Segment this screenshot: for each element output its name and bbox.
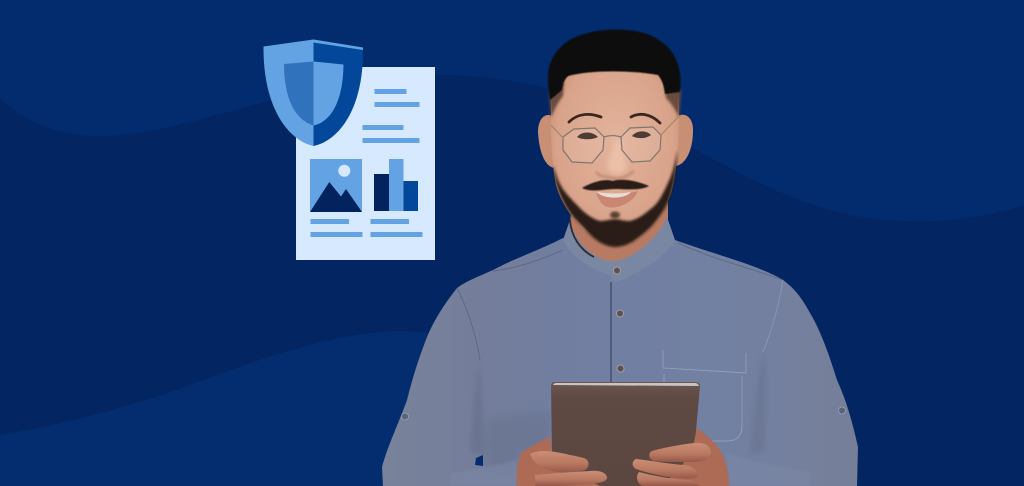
nose shadow (596, 171, 634, 179)
document page (296, 67, 435, 260)
photo: man holding tablet (382, 30, 858, 486)
hair side fade (549, 80, 681, 118)
eyes (577, 131, 651, 139)
ears (538, 115, 693, 168)
shoulder seams (457, 243, 783, 360)
right cuff (725, 452, 810, 486)
left hand (517, 437, 607, 486)
text lines lower (310, 219, 422, 237)
collar inner shadow (570, 220, 594, 257)
soul patch (610, 212, 620, 218)
top background wave (0, 0, 1024, 221)
mustache (582, 180, 649, 191)
left palm (517, 437, 600, 486)
left cuff (450, 460, 517, 486)
left upper finger (530, 451, 589, 472)
mouth (596, 191, 638, 207)
glasses (551, 117, 678, 163)
tablet top edge (553, 383, 699, 386)
right upper finger (649, 443, 711, 462)
pocket (663, 350, 746, 441)
bar chart icon (374, 159, 418, 211)
illustration: secure document (263, 40, 435, 260)
cuff buttons (402, 407, 846, 420)
neck (570, 195, 668, 262)
placket (610, 282, 612, 382)
left middle finger (535, 471, 607, 486)
beard (553, 150, 677, 247)
eyebrows (569, 114, 660, 123)
lower torso shade (485, 410, 550, 470)
right palm (660, 428, 729, 486)
text lines upper (362, 89, 420, 143)
right lower finger (637, 472, 700, 486)
arm gap background (475, 455, 483, 466)
right middle finger (633, 459, 698, 479)
nose highlight (607, 135, 627, 174)
icon: shield (263, 40, 363, 146)
image placeholder icon (310, 159, 362, 212)
hair (548, 30, 680, 100)
collar (563, 217, 675, 282)
sleeve creases (470, 360, 484, 455)
tablet (551, 382, 700, 486)
teeth (597, 192, 631, 198)
bottom background wave (0, 331, 640, 486)
shirt buttons (614, 267, 624, 372)
face (551, 66, 679, 246)
shirt (382, 238, 858, 486)
right hand (633, 428, 729, 486)
